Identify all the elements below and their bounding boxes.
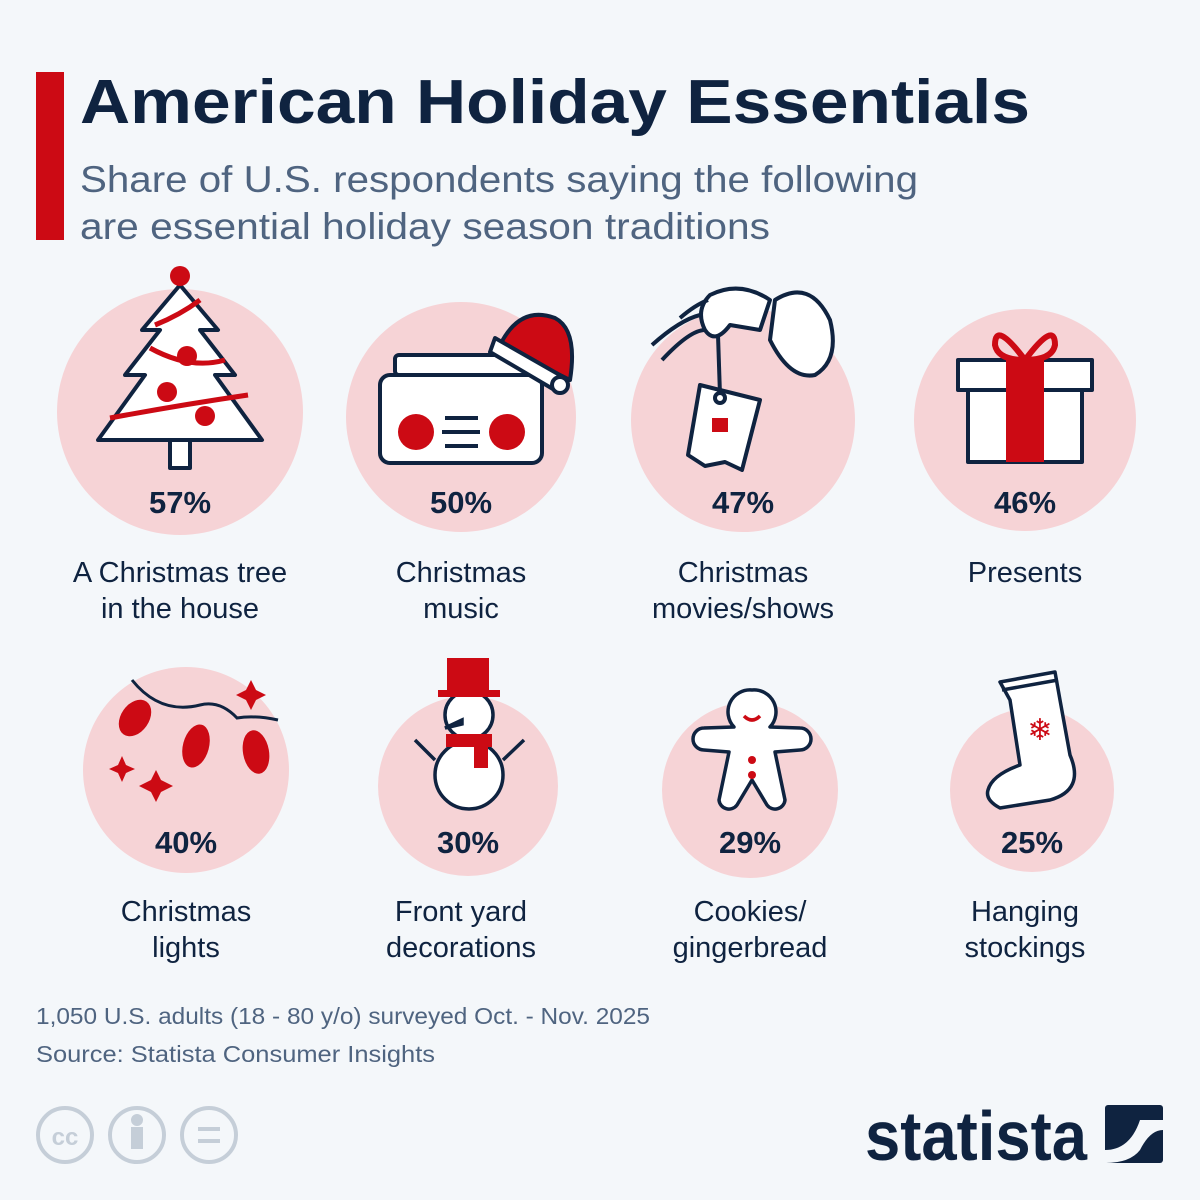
- icon: gingerbread: [693, 690, 811, 809]
- title accent bar: [36, 72, 64, 240]
- item: presents: 46%: [994, 485, 1056, 520]
- subtitle: are essential holiday season traditions: [80, 206, 770, 247]
- item: movies: Christmas: [678, 557, 808, 589]
- item: stockings: Hanging: [971, 896, 1079, 928]
- item: front yard: [378, 658, 558, 964]
- icon: hand with ticket: [652, 289, 833, 470]
- item: lights: 40%: [155, 825, 217, 860]
- footer notes: 1,050 U.S. adults (18 - 80 y/o) surveyed Oct. - Nov. 2025: [36, 1003, 650, 1029]
- item: cookies: [662, 690, 838, 964]
- item: christmas music: Christmas: [396, 557, 526, 589]
- item: movies: 47%: [712, 485, 774, 520]
- icon: string lights: [109, 680, 278, 802]
- item: christmas music: music: [423, 593, 499, 625]
- subtitle: [80, 159, 918, 247]
- icon: snowman: [415, 658, 524, 809]
- item: front yard: Front yard: [395, 896, 527, 928]
- item: movies: movies/shows: [652, 593, 834, 625]
- icon: stocking: ❄: [1027, 714, 1053, 747]
- item: stockings: 25%: [1001, 825, 1063, 860]
- label: [73, 557, 287, 625]
- license icons: [38, 1108, 236, 1162]
- icon: boombox: [380, 315, 572, 463]
- icon: gift: [958, 335, 1092, 462]
- item: presents: Presents: [968, 557, 1082, 589]
- license icons: cc: [52, 1124, 78, 1151]
- item: stockings: [950, 672, 1114, 964]
- icon: stocking: [988, 672, 1074, 808]
- item: front yard: decorations: [386, 932, 536, 964]
- item: presents: [914, 309, 1136, 589]
- footer notes: Source: Statista Consumer Insights: [36, 1041, 435, 1067]
- item: lights: [83, 667, 289, 964]
- item: stockings: stockings: [965, 932, 1085, 964]
- percentage: 57%: [149, 485, 211, 520]
- item: cookies: Cookies/: [694, 896, 807, 928]
- item: lights: Christmas: [121, 896, 251, 928]
- footer notes: [36, 1003, 650, 1067]
- item: front yard: 30%: [437, 825, 499, 860]
- statista logo: statista: [865, 1097, 1088, 1175]
- item: movies: [631, 289, 855, 625]
- item: lights: lights: [152, 932, 220, 964]
- label: A Christmas tree: [73, 557, 287, 589]
- item: cookies: 29%: [719, 825, 781, 860]
- subtitle: Share of U.S. respondents saying the following: [80, 159, 918, 200]
- item: christmas music: [346, 302, 576, 625]
- icon: tree: [98, 266, 262, 468]
- title: American Holiday Essentials: [80, 68, 1030, 137]
- item: christmas tree: [57, 266, 303, 625]
- item: christmas music: 50%: [430, 485, 492, 520]
- label: in the house: [101, 593, 259, 625]
- item: cookies: gingerbread: [673, 932, 827, 964]
